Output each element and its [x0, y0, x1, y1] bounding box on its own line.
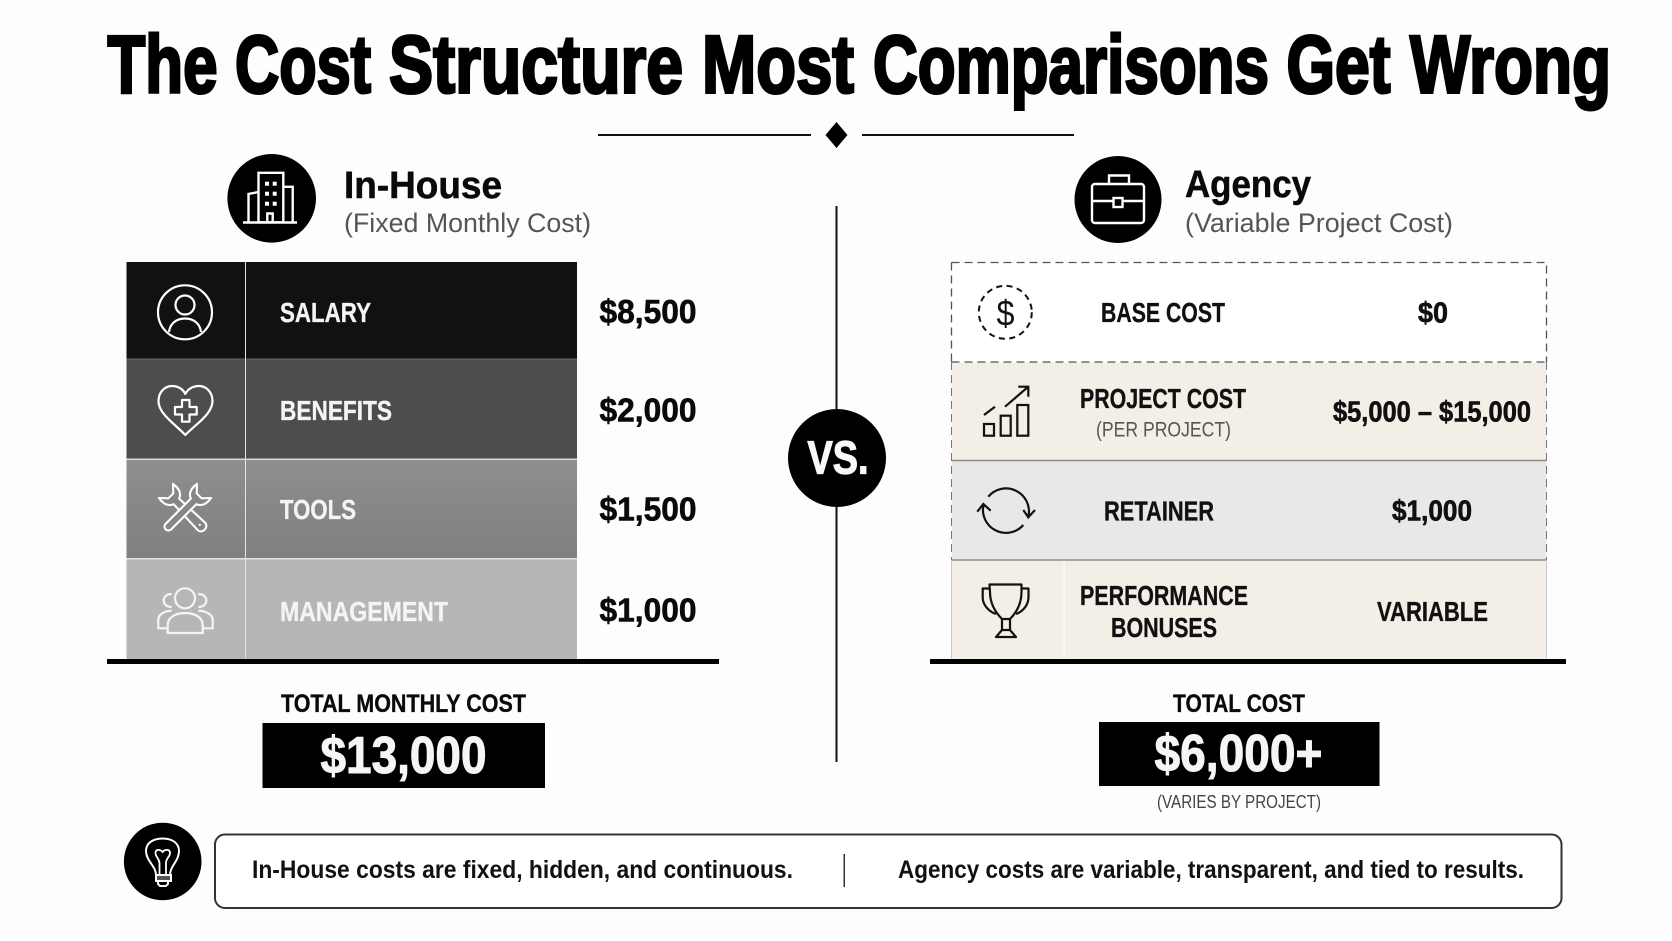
title: Comparisons	[873, 20, 1269, 110]
subheading: variable project cost: (Variable Project Cost)	[1185, 208, 1453, 238]
vs badge	[788, 409, 886, 507]
title: Cost	[235, 20, 371, 110]
row: management	[126, 558, 577, 659]
icon: light bulb	[124, 823, 202, 900]
total: agency: TOTAL COST	[1173, 690, 1305, 718]
icon: briefcase	[1074, 156, 1162, 243]
label: performance: PERFORMANCE	[1080, 580, 1248, 611]
panel: agency header	[1074, 156, 1453, 243]
label: tools: TOOLS	[280, 494, 356, 525]
row: project cost	[952, 362, 1546, 461]
icon: person	[158, 285, 212, 339]
callout: takeaway	[215, 834, 1562, 908]
panel: in-house cost table	[107, 262, 719, 664]
total: in-house: $13,000	[320, 727, 486, 785]
total: agency: (VARIES BY PROJECT)	[1157, 792, 1321, 812]
title	[108, 20, 1611, 110]
amount: salary: $8,500	[600, 293, 696, 330]
panel: in-house header	[227, 154, 591, 243]
row: retainer	[952, 460, 1546, 560]
row: benefits	[126, 359, 577, 459]
amount: base cost: $0	[1418, 298, 1448, 330]
total: agency	[1099, 690, 1380, 812]
amount: management: $1,000	[600, 592, 696, 628]
icon: refresh arrows	[977, 488, 1035, 533]
heading: Agency: Agency	[1185, 164, 1311, 206]
title: Wrong	[1410, 20, 1611, 110]
icon: heart with plus	[158, 386, 212, 435]
amount: tools: $1,500	[600, 490, 696, 528]
icon: crossed wrench and screwdriver	[158, 484, 212, 537]
panel: agency cost table	[930, 262, 1566, 664]
row: tools	[126, 459, 577, 558]
label: project cost: PROJECT COST	[1080, 383, 1246, 414]
takeaway: in-house: In-House costs are fixed, hidden, and continuous.	[252, 856, 793, 884]
total: in-house: TOTAL MONTHLY COST	[281, 690, 526, 718]
center divider line	[836, 206, 838, 762]
icon: dashed dollar coin: $	[996, 292, 1014, 334]
row: salary	[126, 262, 577, 359]
icon: growth chart	[984, 387, 1028, 436]
icon: office building	[227, 154, 316, 243]
label: base cost: BASE COST	[1101, 297, 1225, 328]
row: performance bonuses	[952, 561, 1546, 659]
icon: dashed dollar coin	[979, 286, 1032, 339]
label: salary: SALARY	[280, 297, 371, 328]
total: agency: $6,000+	[1154, 725, 1322, 783]
title: The	[108, 20, 218, 110]
row: base cost	[952, 262, 1546, 362]
icon: trophy	[983, 584, 1028, 637]
note: per project: (PER PROJECT)	[1096, 418, 1231, 442]
subheading: fixed monthly cost: (Fixed Monthly Cost)	[344, 208, 591, 238]
amount: performance bonuses: VARIABLE	[1377, 596, 1488, 627]
total: in-house	[262, 690, 545, 788]
title divider with diamond	[598, 122, 1074, 148]
amount: project cost: $5,000 – $15,000	[1333, 396, 1531, 428]
title: Structure	[389, 20, 683, 110]
takeaway: agency: Agency costs are variable, transparent, and tied to results.	[898, 856, 1524, 884]
amount: retainer: $1,000	[1392, 496, 1472, 528]
label: bonuses: BONUSES	[1111, 612, 1217, 643]
title: Most	[702, 20, 854, 110]
label: retainer: RETAINER	[1104, 496, 1214, 526]
vs badge: VS.	[808, 432, 868, 484]
label: benefits: BENEFITS	[280, 395, 392, 426]
icon: team	[158, 588, 213, 633]
title: Get	[1286, 20, 1390, 110]
amount: benefits: $2,000	[600, 392, 696, 428]
label: management: MANAGEMENT	[280, 596, 448, 627]
heading: In-House: In-House	[344, 165, 502, 207]
